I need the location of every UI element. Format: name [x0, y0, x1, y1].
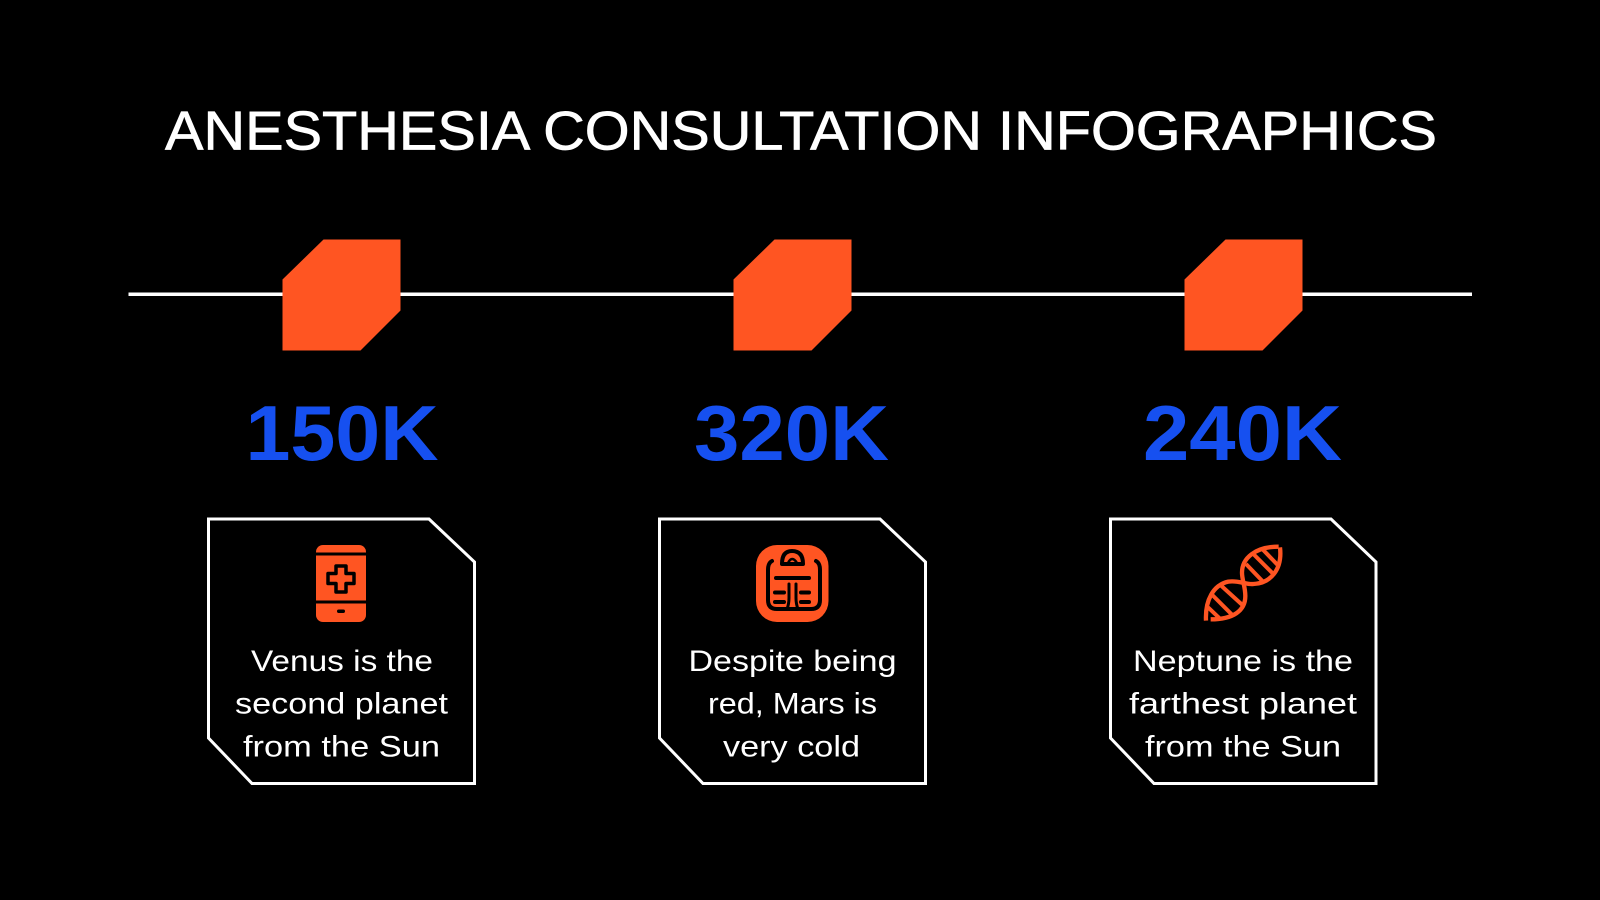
- card text 2: [688, 645, 896, 764]
- card text 3: farthest planet: [1129, 688, 1358, 720]
- card text 1: second planet: [235, 688, 449, 720]
- card text 1: [235, 645, 449, 764]
- card text 1: Venus is the: [251, 645, 433, 678]
- card text 2: Despite being: [688, 645, 896, 678]
- value 150K: 150K: [246, 389, 438, 477]
- title: ANESTHESIA CONSULTATION INFOGRAPHICS: [165, 100, 1437, 162]
- hexagon marker 1: [282, 240, 400, 350]
- column 3: [1110, 240, 1376, 784]
- card outline 3: [1110, 519, 1376, 784]
- card text 3: from the Sun: [1145, 730, 1341, 764]
- value 320K: 320K: [694, 389, 889, 477]
- card text 2: very cold: [723, 730, 860, 764]
- icon: medical phone: [316, 545, 366, 622]
- card text 2: red, Mars is: [708, 688, 877, 720]
- column 1: [208, 240, 474, 784]
- timeline line: [128, 292, 1472, 296]
- card outline 1: [208, 519, 474, 784]
- icon: weighing scale: [756, 545, 828, 622]
- hexagon marker 3: [1184, 240, 1302, 350]
- value 240K: 240K: [1143, 389, 1342, 477]
- icon: DNA helix: [1206, 547, 1280, 621]
- card text 3: Neptune is the: [1133, 645, 1353, 678]
- card outline 2: [660, 519, 926, 784]
- card text 3: [1129, 645, 1358, 764]
- card text 1: from the Sun: [243, 730, 440, 764]
- hexagon marker 2: [734, 240, 852, 350]
- column 2: [660, 240, 926, 784]
